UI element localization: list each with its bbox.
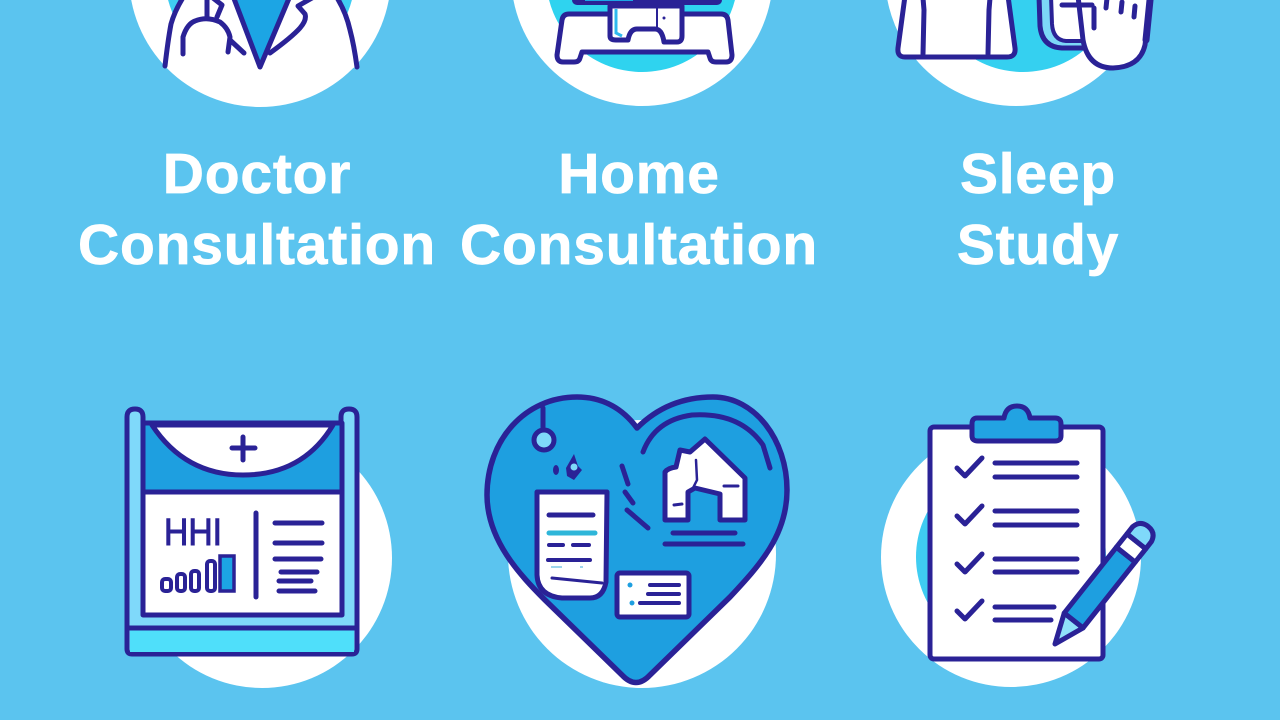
icon: heart with home care — [487, 397, 787, 688]
icon: doctor in lab coat — [129, 0, 391, 107]
icon: document — [537, 492, 607, 598]
heading: Home Consultation — [460, 142, 818, 277]
heading: Home Consultation: Consultation — [460, 213, 818, 277]
heading: Doctor Consultation: Doctor — [163, 142, 351, 206]
heading: Doctor Consultation: Consultation — [78, 213, 436, 277]
icon: pendant — [534, 408, 554, 450]
mini bar chart — [162, 556, 234, 591]
icon: small card — [617, 573, 689, 617]
heading: Doctor Consultation — [78, 142, 436, 277]
heading: Sleep Study — [957, 142, 1119, 277]
heading: Home Consultation: Home — [558, 142, 720, 206]
heading: Sleep Study: Sleep — [960, 142, 1116, 206]
icon: house — [665, 439, 745, 520]
icon: clipboard checklist with pencil — [881, 406, 1158, 687]
icon: clipboard clip — [972, 406, 1061, 441]
checklist items — [957, 458, 1077, 620]
icon: pencil — [1046, 519, 1158, 651]
heading: Sleep Study: Study — [957, 213, 1119, 277]
icon: sleep study shirt and tablet — [885, 0, 1151, 106]
icon: home consultation device — [511, 0, 773, 106]
icon: medical report chart — [127, 409, 392, 688]
icon: plus sign — [232, 437, 255, 460]
label: HHI: HHI — [164, 512, 222, 554]
